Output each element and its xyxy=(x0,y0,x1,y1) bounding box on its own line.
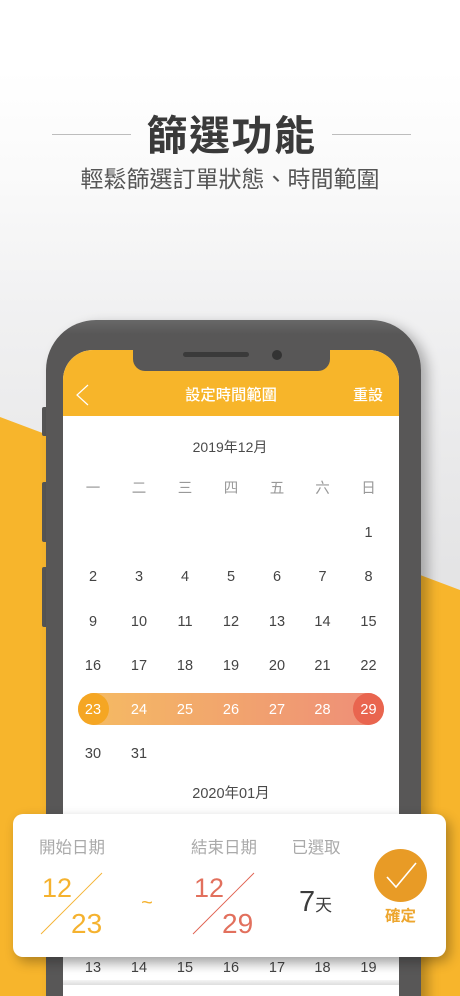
weekday header: 三 xyxy=(178,481,192,497)
end date value: 12 xyxy=(194,873,224,903)
app header xyxy=(63,350,399,416)
calendar January partial row: 15 xyxy=(177,960,193,976)
header title: 設定時間範圍 xyxy=(185,387,277,404)
calendar December grid: 13 xyxy=(269,614,285,630)
notch xyxy=(133,348,330,371)
end date marker xyxy=(353,693,384,725)
calendar December grid: 22 xyxy=(360,658,377,674)
calendar December grid: 9 xyxy=(89,614,97,630)
calendar December grid: 18 xyxy=(177,658,193,674)
title: 篩選功能 xyxy=(146,113,316,159)
calendar December grid: 7 xyxy=(318,569,327,585)
date summary panel xyxy=(13,814,446,957)
subtitle: 輕鬆篩選訂單狀態、時間範圍 xyxy=(80,166,380,192)
end date value xyxy=(192,872,254,938)
weekday header xyxy=(86,480,376,497)
start date value xyxy=(40,872,102,938)
tilde: ~ xyxy=(141,892,153,914)
calendar December grid: 1 xyxy=(364,525,373,541)
start date label: 開始日期 xyxy=(39,839,105,857)
calendar December grid: 31 xyxy=(131,746,147,762)
calendar January partial row: 14 xyxy=(131,960,147,976)
weekday header: 一 xyxy=(86,481,100,497)
selected days value: 7天 xyxy=(299,886,332,918)
screen xyxy=(63,350,399,996)
calendar December grid: 4 xyxy=(181,569,189,585)
reset button: 重設 xyxy=(353,387,383,404)
calendar December grid: 16 xyxy=(85,658,101,674)
weekday header: 五 xyxy=(270,481,284,497)
calendar December grid xyxy=(85,525,377,762)
month heading December: 2019年12月 xyxy=(193,439,267,455)
calendar December grid: 14 xyxy=(314,614,331,630)
selected range bar: 24 xyxy=(131,702,147,718)
month heading January: 2020年01月 xyxy=(192,786,270,802)
weekday header: 六 xyxy=(315,481,330,497)
calendar December grid: 6 xyxy=(273,569,281,585)
start date value: 12 xyxy=(42,873,72,903)
end date label: 結束日期 xyxy=(191,839,257,857)
phone xyxy=(42,317,435,996)
calendar January partial row: 17 xyxy=(269,960,285,976)
weekday header: 四 xyxy=(224,481,238,497)
calendar December grid: 12 xyxy=(223,614,239,630)
calendar January partial row: 18 xyxy=(314,960,331,976)
calendar December grid: 8 xyxy=(364,569,373,585)
list shadow under panel xyxy=(63,957,399,973)
calendar December grid: 21 xyxy=(314,658,331,674)
calendar January partial row: 13 xyxy=(85,960,101,976)
calendar December grid: 17 xyxy=(131,658,147,674)
calendar December grid: 19 xyxy=(223,658,239,674)
phone body xyxy=(46,320,421,996)
calendar December grid: 2 xyxy=(89,569,97,585)
selected range bar: 27 xyxy=(269,702,285,718)
selected range bar: 26 xyxy=(223,702,239,718)
selected range bar: 23 xyxy=(85,702,101,718)
weekday header: 二 xyxy=(132,481,146,497)
confirm label: 確定 xyxy=(385,908,416,925)
weekday header: 日 xyxy=(361,481,376,497)
calendar December grid: 11 xyxy=(177,614,193,630)
calendar January partial row: 16 xyxy=(223,960,239,976)
calendar December grid: 5 xyxy=(227,569,235,585)
calendar January partial row: 19 xyxy=(360,960,377,976)
side buttons xyxy=(42,407,48,436)
selected label: 已選取 xyxy=(292,839,340,857)
confirm icon xyxy=(374,849,427,902)
calendar January partial row xyxy=(85,960,377,976)
camera xyxy=(272,350,282,360)
selected range bar: 29 xyxy=(360,702,377,718)
start date marker xyxy=(78,693,109,725)
selected range bar xyxy=(78,693,384,725)
selected range bar: 25 xyxy=(177,702,193,718)
calendar December grid: 3 xyxy=(135,569,143,585)
calendar December grid: 15 xyxy=(360,614,377,630)
bottom list divider xyxy=(63,980,399,985)
calendar December grid: 20 xyxy=(269,658,285,674)
speaker xyxy=(183,352,249,357)
back arrow icon xyxy=(76,384,88,406)
calendar December grid: 30 xyxy=(85,746,101,762)
calendar December grid: 10 xyxy=(131,614,147,630)
selected range bar: 28 xyxy=(314,702,331,718)
